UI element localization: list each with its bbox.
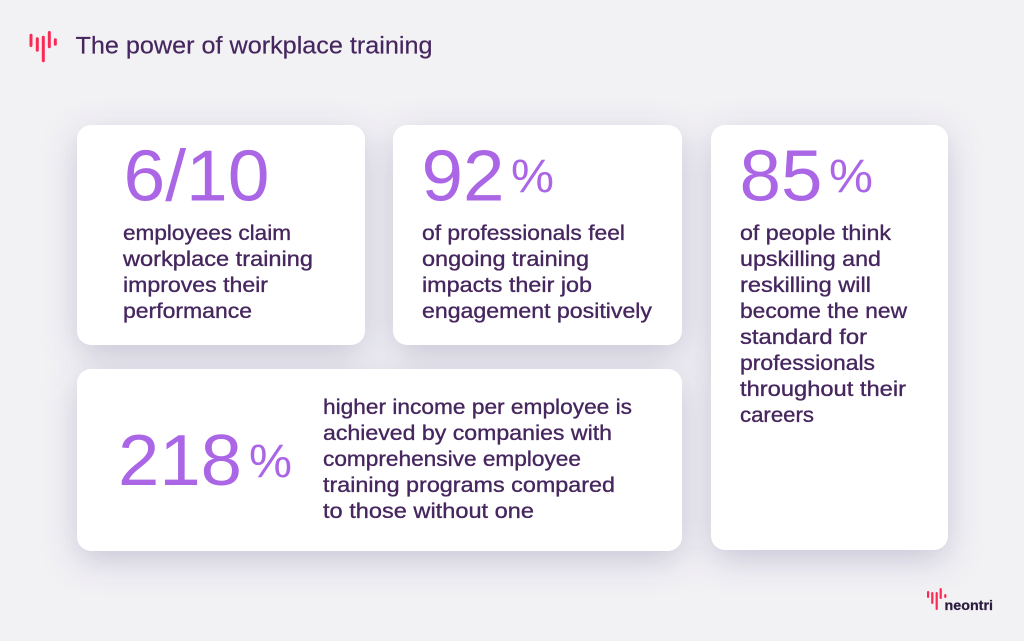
text: upskilling description: of people think	[740, 221, 891, 245]
text: employees description: improves their	[123, 273, 268, 297]
text: income description: achieved by companies with	[323, 421, 612, 445]
stat: 92%	[422, 136, 554, 216]
text: income description	[323, 395, 632, 523]
title: The power of workplace training	[76, 32, 432, 60]
text: upskilling description	[740, 221, 908, 427]
logo: neontri	[927, 588, 993, 613]
text: employees description: performance	[123, 299, 252, 323]
text: upskilling description: professionals	[740, 351, 875, 375]
panel: 85% people	[711, 125, 948, 550]
text: upskilling description: reskilling will	[740, 273, 871, 297]
text: professionals description: impacts their job	[422, 273, 592, 297]
stat: 85%: %	[829, 149, 873, 202]
text: income description: comprehensive employee	[323, 447, 581, 471]
text: upskilling description: throughout their	[740, 377, 906, 401]
text: upskilling description: careers	[740, 403, 814, 427]
panel: 92% professionals	[393, 125, 682, 345]
text: professionals description	[422, 221, 652, 323]
text: income description: training programs compared	[323, 473, 615, 497]
text: professionals description: of professionals feel	[422, 221, 625, 245]
text: professionals description: ongoing training	[422, 247, 589, 271]
text: employees description	[122, 221, 313, 323]
stat: 218%: %	[249, 434, 292, 487]
stat: 218%	[118, 421, 292, 501]
text: income description: to those without one	[323, 499, 534, 523]
logo wordmark: neontri	[944, 597, 993, 613]
stat: 6/10: 6/10	[124, 136, 270, 216]
icon: footer waveform	[927, 588, 946, 610]
stat: 218%: 218	[118, 421, 242, 501]
text: income description: higher income per employee is	[323, 395, 632, 419]
text: upskilling description: standard for	[740, 325, 867, 349]
stat: 85%: 85	[740, 136, 822, 216]
panel: 6/10 employees	[77, 125, 365, 345]
icon: header waveform logo	[30, 31, 57, 62]
text: upskilling description: become the new	[740, 299, 908, 323]
stat: 92%: %	[511, 149, 554, 202]
text: upskilling description: upskilling and	[740, 247, 881, 271]
text: employees description: workplace training	[122, 247, 313, 271]
stat: 85%	[740, 136, 873, 216]
text: professionals description: engagement positively	[422, 299, 652, 323]
stat: 92%: 92	[422, 136, 504, 216]
panel: 218% income	[77, 369, 682, 551]
text: employees description: employees claim	[123, 221, 291, 245]
